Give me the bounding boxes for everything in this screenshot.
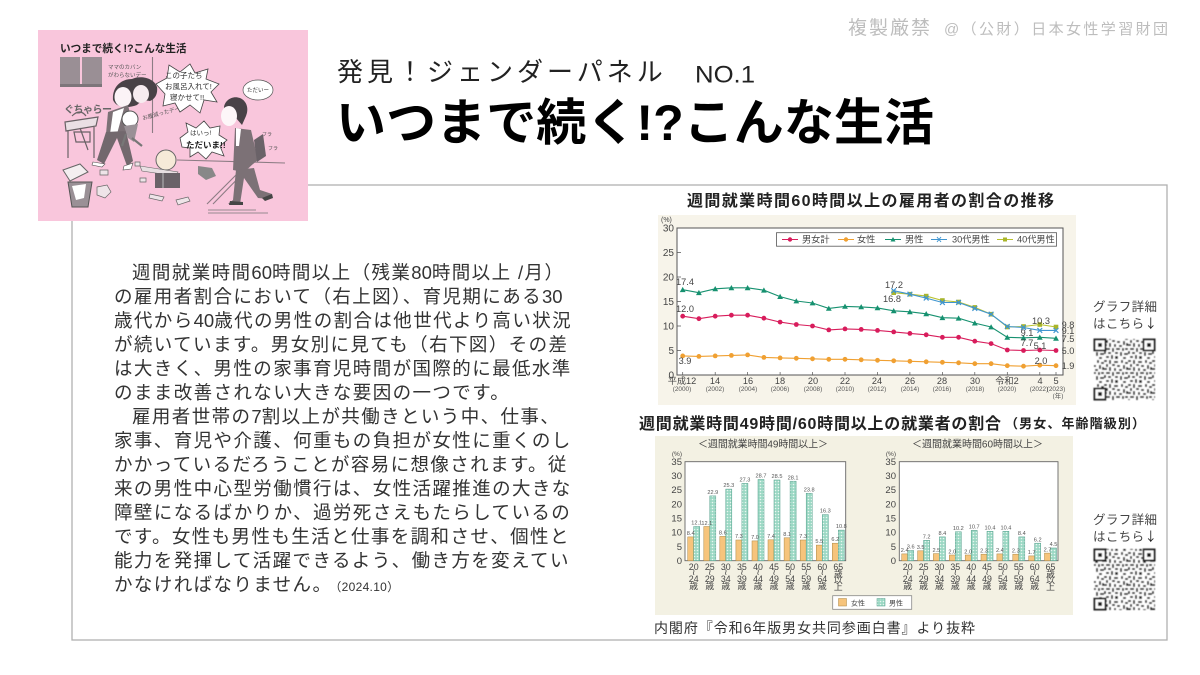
QR caption 1: はこちら↓	[1093, 313, 1157, 332]
QR caption 1	[1093, 299, 1157, 332]
right bar chart: 49	[982, 574, 992, 584]
right bar chart: 65	[1046, 562, 1055, 572]
right bar chart: 歳	[1030, 580, 1039, 591]
source note: 内閣府『令和6年版男女共同参画白書』より抜粋	[654, 620, 975, 636]
content frame	[72, 185, 1167, 640]
right bar chart: 34	[935, 574, 944, 584]
left bar chart: 7.3	[735, 534, 743, 540]
x axis labels: (2023)	[1047, 386, 1065, 393]
series: total	[683, 315, 1056, 350]
x axis labels: (2008)	[804, 386, 822, 393]
left bar chart: ≀	[788, 567, 792, 577]
value labels: 17.2	[885, 280, 903, 290]
left bar chart: 歳	[721, 580, 730, 591]
man in suit	[221, 97, 273, 205]
right bar chart: 39	[950, 574, 960, 584]
left bar chart: 以	[834, 576, 843, 586]
panel number: NO.1	[695, 62, 755, 88]
right bar chart: 8.4	[1018, 531, 1026, 537]
x axis labels: 20	[808, 376, 818, 386]
right bar chart	[885, 451, 1058, 592]
left bar chart: 8.1	[783, 532, 791, 538]
right bar chart: 3.6	[907, 544, 915, 550]
right bar chart: 2.0	[948, 550, 956, 556]
right bar chart: 歳	[1046, 568, 1055, 579]
left bar chart: 7.3	[799, 534, 807, 540]
right bar chart: 歳	[903, 580, 912, 591]
left bar chart: 35	[737, 562, 747, 572]
chart 1 heading: 週間就業時間60時間以上の雇用者の割合の推移	[687, 192, 1054, 210]
left bar chart: 歳	[802, 580, 811, 591]
value labels: 2.0	[1035, 356, 1047, 366]
right bar chart: 歳	[998, 580, 1007, 591]
speech text: onomatopoeia: ぐちゃらー	[64, 104, 112, 116]
left bar chart: 60	[817, 562, 827, 572]
left bar chart: ≀	[724, 567, 727, 577]
right bar chart: 2.3	[980, 548, 988, 554]
paragraph 2: 雇用者世帯の7割以上が共働きという中、仕事、	[132, 406, 560, 427]
left bar chart: 34	[721, 574, 731, 584]
left bar chart: 30	[721, 562, 731, 572]
right bar chart: 2.0	[964, 550, 972, 556]
right bar chart: 29	[919, 574, 929, 584]
x axis labels: (2012)	[868, 386, 886, 393]
cartoon illustration panel	[38, 30, 308, 221]
left bar chart: 25	[705, 562, 715, 572]
value labels	[676, 277, 1074, 371]
value labels: 7.5	[1062, 334, 1074, 344]
left bar chart: 歳	[689, 580, 698, 591]
right bar chart: 3.5	[917, 545, 924, 551]
left bar chart: 歳	[705, 580, 714, 591]
paragraph 1: が続いています。男女別に見ても（右下図）その差	[114, 334, 568, 355]
speech text: woman thought: がわらないデー	[108, 71, 147, 79]
left bar chart: 54	[785, 574, 795, 584]
right bar chart: ≀	[954, 567, 957, 577]
left bar chart: 55	[801, 562, 811, 572]
room background	[60, 57, 285, 204]
series: men in 30s	[894, 291, 1056, 330]
x axis labels: 26	[905, 376, 915, 386]
left bar chart: 15	[671, 514, 682, 524]
x axis labels: (2018)	[966, 386, 984, 393]
left bar chart: 歳	[770, 580, 779, 591]
right bar chart: 40	[966, 562, 976, 572]
left bar chart: ≀	[708, 567, 711, 577]
bar charts: working hours by age	[655, 436, 1073, 615]
chart legend: 40代男性	[1017, 234, 1055, 245]
cartoon title: いつまで続く!?こんな生活	[60, 42, 187, 55]
speech bubble: request: この子たち	[165, 71, 202, 80]
baby and scattered toys	[63, 150, 216, 207]
right bar chart: 44	[966, 574, 976, 584]
y axis labels: 25	[663, 248, 674, 259]
chart 2 heading: 週間就業時間49時間/60時間以上の就業者の割合	[639, 415, 1001, 433]
copyright notice: @（公財）日本女性学習財団	[944, 21, 1168, 38]
left bar chart: 65	[833, 562, 843, 572]
chart legend: 女性	[857, 234, 875, 245]
left bar chart: 8.6	[719, 530, 727, 536]
value labels: 10.3	[1032, 316, 1050, 326]
speech bubble: request: 寝かせて!!	[170, 92, 204, 102]
paragraph 2: 障壁になるばかりか、過労死さえもたらしているの	[114, 502, 571, 523]
bar chart legend: 男性	[889, 598, 903, 608]
right bar chart: 59	[1014, 574, 1024, 584]
y axis labels: (%)	[661, 217, 672, 224]
left bar chart: 7.0	[751, 535, 759, 541]
right bar chart: 2.4	[996, 548, 1004, 554]
series: female	[683, 355, 1056, 366]
speech text: baby: お腹減ったデー	[141, 104, 181, 122]
chart 2 heading	[639, 415, 1145, 433]
speech bubble: request	[156, 64, 219, 113]
left bar chart: 16.3	[820, 508, 831, 514]
y axis labels: 30	[663, 224, 674, 234]
right bar chart: 7.2	[923, 534, 930, 540]
right bar chart: ≀	[938, 567, 941, 577]
x axis labels: (2020)	[998, 386, 1016, 393]
right bar chart: 4.5	[1050, 542, 1057, 548]
main title: いつまで続く!?こんな生活	[336, 95, 934, 151]
left bar chart: 29	[705, 574, 715, 584]
value labels: 17.4	[676, 277, 694, 287]
man footnote marks: フラ	[268, 146, 278, 152]
y axis labels: 10	[663, 322, 674, 332]
left bar chart: 28.5	[772, 474, 782, 480]
left bar chart: 27.3	[739, 478, 750, 484]
left bar chart: 10.8	[836, 524, 847, 530]
value labels: 9.1	[1062, 326, 1074, 336]
chart legend: 男女計	[802, 234, 830, 245]
right bar chart: 10.7	[969, 524, 980, 530]
speech bubble: man	[243, 80, 273, 100]
series: men in 40s	[894, 293, 1056, 327]
x axis labels: 24	[872, 376, 882, 386]
right bar chart: 10.4	[1000, 526, 1011, 532]
right chart title: ＜週間就業時間60時間以上＞	[912, 438, 1043, 450]
left bar chart: 30	[671, 471, 682, 482]
left bar chart: 6.2	[831, 537, 839, 543]
right bar chart: ≀	[985, 567, 989, 577]
x axis labels: 18	[775, 376, 785, 386]
left bar chart: 23.8	[804, 488, 815, 494]
right bar chart: 45	[982, 562, 992, 572]
right bar chart: 10	[885, 528, 896, 539]
speech bubble: tadaima	[180, 121, 227, 159]
right bar chart: 54	[998, 574, 1008, 584]
value labels: 9.8	[1062, 320, 1074, 330]
woman with baby	[92, 77, 157, 170]
left bar chart: 歳	[834, 568, 843, 579]
x axis labels: 4	[1037, 376, 1043, 386]
right bar chart: 35	[885, 457, 896, 468]
right bar chart: 2.3	[1012, 548, 1020, 554]
right bar chart: ≀	[1001, 567, 1005, 577]
right bar chart: ≀	[922, 567, 925, 577]
value labels: 5.1	[1034, 341, 1046, 351]
left bar chart: 28.1	[788, 476, 799, 482]
right bar chart: 2.4	[901, 548, 909, 554]
left bar chart: 20	[689, 562, 699, 572]
right bar chart: 50	[998, 562, 1008, 572]
y axis labels: 15	[663, 297, 674, 308]
x axis labels: (2022)	[1030, 386, 1048, 393]
right bar chart: 25	[919, 562, 929, 572]
QR code 1	[1094, 339, 1155, 400]
paragraph 1: の雇用者割合において（右上図）、育児期にある30	[114, 286, 563, 307]
x axis labels: 14	[710, 376, 720, 386]
left bar chart: (%)	[672, 451, 682, 458]
x axis labels: (2002)	[706, 386, 724, 393]
left bar chart: ≀	[756, 567, 760, 577]
bar chart legend: 女性	[851, 598, 865, 608]
left bar chart: 8.4	[687, 531, 695, 537]
left bar chart: ≀	[692, 567, 695, 577]
left bar chart: 歳	[818, 580, 827, 591]
left bar chart: ≀	[805, 567, 808, 577]
left bar chart: 20	[671, 499, 682, 510]
cluttered table	[65, 112, 98, 158]
man footnote marks	[262, 132, 278, 152]
speech bubble: man: ただいー	[247, 87, 269, 94]
right bar chart: 25	[885, 485, 896, 496]
right bar chart: ≀	[1017, 567, 1020, 577]
value labels: 3.9	[679, 356, 691, 366]
left bar chart: 24	[689, 574, 699, 584]
man footnote marks: フラ	[262, 132, 272, 138]
x axis labels: 令和2	[995, 375, 1019, 386]
right bar chart: 10.2	[953, 526, 964, 532]
x axis labels: (2014)	[901, 386, 919, 393]
right bar chart: 5	[891, 542, 896, 553]
speech bubble: tadaima: ただいま!!	[186, 140, 226, 150]
x axis labels: 30	[970, 376, 980, 386]
chart legend: 男性	[905, 234, 923, 245]
bar chart legend	[833, 596, 912, 609]
left bar chart: 12.1	[701, 521, 712, 527]
QR caption 1: グラフ詳細	[1093, 299, 1157, 314]
left bar chart: 0	[677, 556, 682, 567]
chart legend	[776, 233, 1056, 246]
x axis labels: (2016)	[933, 386, 951, 393]
left bar chart: 59	[801, 574, 811, 584]
panel label: 発見！ジェンダーパネル	[337, 57, 667, 87]
right bar chart: 2.7	[1044, 548, 1051, 554]
right bar chart: 歳	[951, 580, 960, 591]
x axis labels: 28	[937, 376, 947, 386]
left bar chart: 5.5	[815, 539, 823, 545]
right bar chart: 64	[1030, 574, 1040, 584]
left bar chart: 歳	[754, 580, 763, 591]
right bar chart: 20	[903, 562, 913, 572]
chart legend: 30代男性	[952, 234, 990, 245]
right bar chart: 10.4	[985, 526, 995, 532]
paragraph 1: 歳代から40歳代の男性の割合は他世代より高い状況	[114, 310, 572, 331]
paragraph 2: 来の男性中心型労働慣行は、女性活躍推進の大きな	[114, 478, 572, 499]
right bar chart: 2.5	[933, 548, 940, 554]
value labels: 1.9	[1062, 361, 1074, 371]
paragraph 1: のまま改善されない大きな要因の一つです。	[114, 382, 510, 403]
left bar chart: 10	[671, 528, 682, 539]
x axis labels: (2004)	[739, 386, 757, 393]
speech text: woman thought	[108, 64, 147, 79]
right bar chart: ≀	[906, 567, 909, 577]
left bar chart: 50	[785, 562, 795, 572]
QR caption 2	[1093, 512, 1157, 545]
right bar chart: 20	[885, 499, 896, 510]
speech bubble: request: お風呂入れて!	[165, 82, 212, 91]
value labels: 5.0	[1062, 346, 1074, 356]
right bar chart: 6.2	[1034, 538, 1042, 544]
left bar chart: 28.7	[756, 474, 766, 480]
paragraph 2: です。女性も男性も生活と仕事を調和させ、個性と	[114, 526, 570, 547]
value labels: 7.7	[1021, 338, 1033, 348]
x axis labels: (2010)	[836, 386, 854, 393]
left bar chart: 25	[671, 485, 682, 496]
right bar chart: 60	[1030, 562, 1040, 572]
x axis labels	[668, 375, 1065, 400]
paragraph 2: 家事、育児や介護、何重もの負担が女性に重くのし	[114, 430, 572, 451]
right bar chart: ≀	[970, 567, 973, 577]
left bar chart: 49	[769, 574, 779, 584]
right bar chart: (%)	[886, 451, 896, 458]
left bar chart: 40	[753, 562, 763, 572]
left bar chart: 44	[753, 574, 763, 584]
x axis labels: (2000)	[673, 386, 691, 393]
line chart: long working hours trend	[658, 215, 1076, 405]
right bar chart: 35	[950, 562, 960, 572]
right bar chart: 歳	[1014, 580, 1023, 591]
right bar chart: 歳	[919, 580, 928, 591]
right bar chart: 歳	[967, 580, 976, 591]
right bar chart: 15	[885, 514, 896, 524]
QR code 2	[1094, 549, 1155, 610]
left bar chart: 35	[671, 457, 682, 468]
right bar chart: 以	[1046, 576, 1055, 586]
series: male	[683, 288, 1056, 338]
paragraph 1: は大きく、男性の家事育児時間が国際的に最低水準	[114, 358, 572, 379]
right bar chart: 8.4	[939, 531, 946, 537]
left bar chart: 64	[817, 574, 827, 584]
body text	[114, 262, 572, 595]
right bar chart: 歳	[935, 580, 944, 591]
right bar chart: 24	[903, 574, 913, 584]
left bar chart	[671, 451, 847, 592]
right bar chart: ≀	[1033, 567, 1036, 577]
left bar chart: ≀	[821, 567, 824, 577]
left bar chart: 歳	[737, 580, 746, 591]
x axis labels: 平成12	[668, 375, 696, 386]
paragraph 2	[114, 406, 572, 595]
paragraph 2: 能力を発揮して活躍できるよう、働き方を変えてい	[114, 550, 570, 571]
speech bubble: tadaima: はいっ!	[190, 129, 212, 137]
y axis labels	[661, 217, 674, 382]
left bar chart: ≀	[740, 567, 744, 577]
QR caption 2: はこちら↓	[1093, 526, 1157, 545]
y axis ticks	[677, 252, 1056, 375]
copyright notice	[848, 17, 1168, 39]
right bar chart: 30	[885, 471, 896, 482]
left bar chart: 45	[769, 562, 779, 572]
paragraph 2: かなければなりません。（2024.10）	[114, 574, 399, 595]
right bar chart: 55	[1014, 562, 1024, 572]
speech text: woman thought: ママのカバン	[108, 64, 142, 71]
small credit	[208, 210, 268, 213]
value labels: 16.8	[883, 294, 901, 304]
left bar chart: 22.9	[707, 490, 718, 496]
value labels: 12.0	[676, 304, 694, 314]
y axis labels: 0	[668, 370, 674, 382]
value labels: 9.1	[1021, 328, 1033, 338]
y axis labels: 20	[663, 272, 674, 284]
chart 2 heading: （男女、年齢階級別）	[1005, 416, 1145, 431]
left bar chart: 25.3	[723, 483, 734, 489]
x axis labels: (2006)	[771, 386, 789, 393]
right bar chart: 上	[1046, 582, 1055, 592]
right bar chart: 歳	[983, 580, 992, 591]
left bar chart: 39	[737, 574, 747, 584]
x axis labels: (年)	[1053, 391, 1063, 400]
QR caption 2: グラフ詳細	[1093, 512, 1157, 527]
copyright notice: 複製厳禁	[848, 17, 932, 39]
left bar chart: 上	[834, 582, 843, 592]
x axis labels: 22	[840, 376, 850, 386]
paragraph 1: 週間就業時間60時間以上（残業80時間以上 /月）	[132, 262, 564, 283]
right bar chart: 1.7	[1028, 550, 1036, 556]
x axis labels: 5	[1053, 376, 1059, 386]
paragraph 2: かかっているだろうことが容易に想像されます。従	[114, 454, 568, 475]
y axis labels: 5	[668, 346, 674, 357]
right bar chart: 0	[891, 556, 896, 567]
left bar chart: 5	[677, 542, 682, 553]
right bar chart: 30	[935, 562, 944, 572]
left bar chart: ≀	[772, 567, 776, 577]
left chart title: ＜週間就業時間49時間以上＞	[698, 438, 828, 450]
paragraph 1	[114, 262, 572, 403]
left bar chart: 12.1	[691, 520, 702, 526]
x axis labels: 16	[743, 376, 753, 386]
left bar chart: 7.4	[767, 534, 775, 540]
left bar chart: 歳	[786, 580, 795, 591]
